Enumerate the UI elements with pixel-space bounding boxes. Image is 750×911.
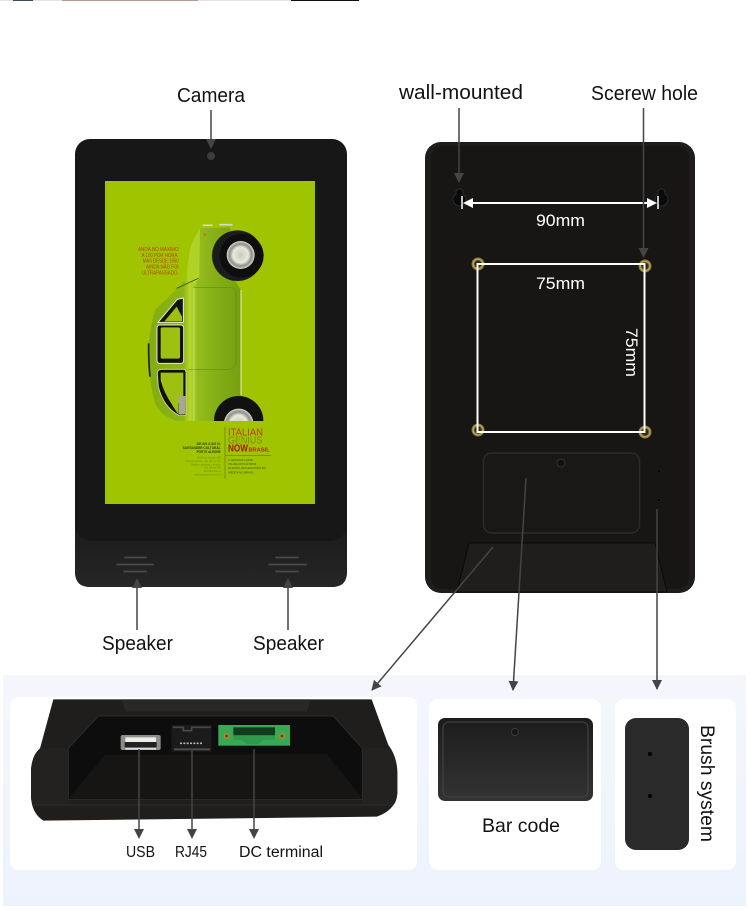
- arrow: camera: [206, 110, 216, 149]
- poster headline text: [138, 246, 179, 276]
- poster logo text: italiangeniusnow.com.br: [195, 473, 221, 476]
- label: wall-mounted: wall-mounted: [398, 82, 523, 104]
- label: Brush system: Brush system: [696, 725, 718, 842]
- poster logo text: PORTO ALEGRE: [197, 450, 221, 454]
- brush system holes: [657, 469, 661, 502]
- device body front: [75, 139, 347, 587]
- VESA square: [478, 264, 644, 432]
- label: Screw hole: Scerew hole: [591, 83, 698, 105]
- arrow: RJ45: [187, 749, 197, 839]
- illustration: green car poster: [138, 225, 271, 479]
- left speaker grille: [117, 558, 153, 572]
- label: Bar code: Bar code: [482, 815, 560, 837]
- poster logo text: 60 ANOS, EM UMA MOSTRA: [228, 466, 266, 470]
- arrow: wall-mounted: [454, 108, 464, 183]
- illustration: connector bay: [31, 699, 397, 821]
- poster logo text: Entrada franca: [204, 470, 221, 473]
- label: left Speaker: Speaker: [102, 633, 173, 655]
- panel: brush system card: [615, 699, 736, 870]
- windshield: [158, 298, 183, 322]
- VESA screws: [472, 258, 652, 438]
- poster headline text: MAS DESDE 1950: [143, 259, 179, 265]
- poster logo text: [183, 427, 271, 479]
- RJ45 port: [172, 725, 212, 752]
- right speaker grille: [269, 558, 306, 572]
- wall mount keyholes: [453, 189, 668, 206]
- panel: rear view of device: [425, 142, 695, 593]
- dimension label 75mm horizontal: 75mm: [536, 274, 585, 293]
- panel: detail strip background: [3, 675, 746, 906]
- label: DC terminal: DC terminal: [239, 844, 323, 861]
- poster logo text: ITALIANA DOS ÚLTIMOS: [228, 461, 256, 466]
- panel: front view of device: [75, 139, 347, 587]
- label: Camera: Camera: [177, 85, 246, 107]
- poster logo text: Rua Sete de Setembro, 1028: [197, 457, 221, 460]
- poster logo text: Terças a sextas, das 10h às 19h: [186, 460, 221, 463]
- camera lens: [207, 152, 215, 160]
- arrow: bar code: [513, 478, 526, 690]
- arrow: brush system: [656, 509, 658, 689]
- card background: [429, 699, 601, 870]
- top image sliver: [0, 0, 360, 1]
- poster headline text: AINDA NÃO FOI: [146, 264, 179, 271]
- arrow: screw hole: [638, 108, 648, 258]
- arrow: left speaker: [132, 578, 142, 630]
- screen: [105, 181, 315, 504]
- poster logo text: INÉDITA NO BRASIL.: [228, 469, 255, 474]
- poster logo text: NOW: [228, 444, 248, 455]
- arrow: USB: [134, 749, 144, 839]
- card background: [10, 697, 417, 870]
- dimension label 75mm vertical: 75mm: [622, 328, 641, 377]
- panel: bar code card: [429, 699, 601, 870]
- DC terminal: [218, 725, 290, 746]
- arrow: connector bay: [372, 547, 493, 690]
- label: RJ45: RJ45: [175, 844, 207, 861]
- poster logo text: SANTANDER CULTURAL: [183, 446, 221, 450]
- poster headline text: ANDA NO MÁXIMO: [138, 246, 179, 253]
- poster logo text: Sábados, domingos e feriados: [191, 463, 221, 466]
- label: right Speaker: Speaker: [253, 633, 324, 655]
- card background: [615, 699, 736, 870]
- wheels: [212, 230, 263, 281]
- device body rear: [425, 142, 695, 593]
- bar code plate: [438, 718, 593, 801]
- label: USB: USB: [126, 844, 155, 861]
- connector notch: [457, 543, 667, 592]
- poster logo text: GENIUS: [228, 435, 262, 446]
- side window: [157, 325, 184, 363]
- poster headline text: ULTRAPASSADO.: [142, 270, 179, 276]
- arrow: DC terminal: [249, 749, 259, 839]
- poster logo text: BRASIL: [248, 448, 270, 454]
- poster logo text: DE 6/6 A 5/2 N.: [197, 442, 221, 446]
- poster logo text: das 11h às 19h: [204, 468, 221, 470]
- poster logo text: O DESIGN É A ARTE: [228, 457, 253, 462]
- brush plate: [625, 718, 689, 850]
- poster headline text: A 100 POR HORA.: [142, 253, 179, 259]
- arrow: right speaker: [283, 578, 293, 630]
- poster logo text: ITALIAN: [228, 427, 263, 438]
- rear window: [157, 369, 186, 415]
- dimension arrow 90mm: [462, 196, 658, 209]
- speaker chin: [75, 526, 347, 587]
- dimension label 90mm: 90mm: [536, 211, 585, 230]
- USB port: [121, 735, 161, 750]
- barcode plate recess: [484, 453, 640, 533]
- panel: connector card: [10, 697, 417, 870]
